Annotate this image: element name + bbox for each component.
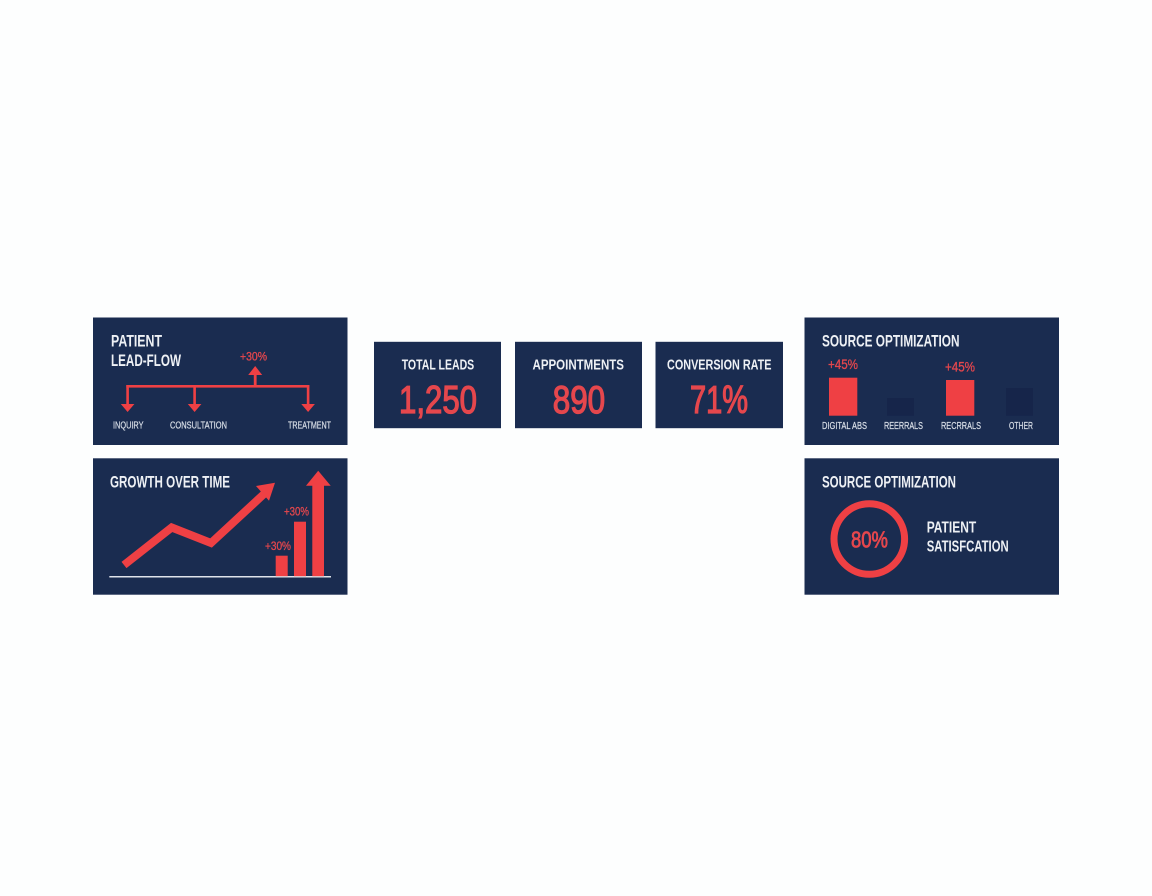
panel: growth over time xyxy=(93,458,348,595)
source labels: DIGITAL ABS xyxy=(822,421,867,432)
donut gauge: 80% xyxy=(834,504,905,574)
KPI card: total leads: 1,250 xyxy=(399,379,477,422)
source labels: RECRRALS xyxy=(941,421,981,432)
label: patient satisfaction: PATIENT xyxy=(927,520,976,537)
heading: growth over time: GROWTH OVER TIME xyxy=(110,473,230,491)
source labels: OTHER xyxy=(1009,421,1033,432)
KPI card: conversion rate: CONVERSION RATE xyxy=(667,356,772,373)
flow stage labels xyxy=(113,421,331,432)
source labels xyxy=(822,421,1033,432)
KPI card: conversion rate: 71% xyxy=(690,379,748,422)
heading: patient lead-flow xyxy=(111,333,181,370)
bar labels: +45% xyxy=(828,356,975,375)
label: patient satisfaction xyxy=(927,520,1009,556)
bar labels: +30% xyxy=(265,539,291,553)
bar labels: +45%: +45% xyxy=(828,356,858,372)
source bars xyxy=(829,378,1033,416)
heading: source optimization: SOURCE OPTIMIZATION xyxy=(822,474,956,492)
flow stage labels: CONSULTATION xyxy=(170,421,227,432)
bar labels: +45%: +45% xyxy=(945,359,975,375)
KPI card: conversion rate xyxy=(656,342,783,428)
heading: patient lead-flow: LEAD-FLOW xyxy=(111,352,181,370)
line chart arrow xyxy=(124,483,275,565)
flow stage labels: INQUIRY xyxy=(113,421,144,432)
heading: source optimization: SOURCE OPTIMIZATION xyxy=(822,333,960,351)
axis line xyxy=(109,576,331,578)
label: patient satisfaction: SATISFCATION xyxy=(927,539,1009,556)
donut gauge: 80%: 80% xyxy=(851,527,888,553)
flow diagram arrows xyxy=(121,366,315,412)
KPI card: appointments: APPOINTMENTS xyxy=(532,356,624,373)
KPI card: appointments xyxy=(515,342,642,428)
KPI card: total leads xyxy=(374,342,501,428)
heading: patient lead-flow: PATIENT xyxy=(111,333,162,351)
bar labels: +30% xyxy=(284,505,309,519)
KPI card: appointments: 890 xyxy=(553,379,605,422)
source labels: REERRALS xyxy=(884,421,923,432)
bar chart with arrow xyxy=(276,471,331,576)
panel: patient lead-flow xyxy=(93,318,348,445)
bar labels xyxy=(265,505,309,553)
flow stage labels: TREATMENT xyxy=(288,421,331,432)
flow label: +30%: +30% xyxy=(240,350,267,364)
panel: patient satisfaction xyxy=(804,458,1059,595)
panel: source optimization bars xyxy=(804,318,1059,445)
KPI card: total leads: TOTAL LEADS xyxy=(402,356,474,373)
